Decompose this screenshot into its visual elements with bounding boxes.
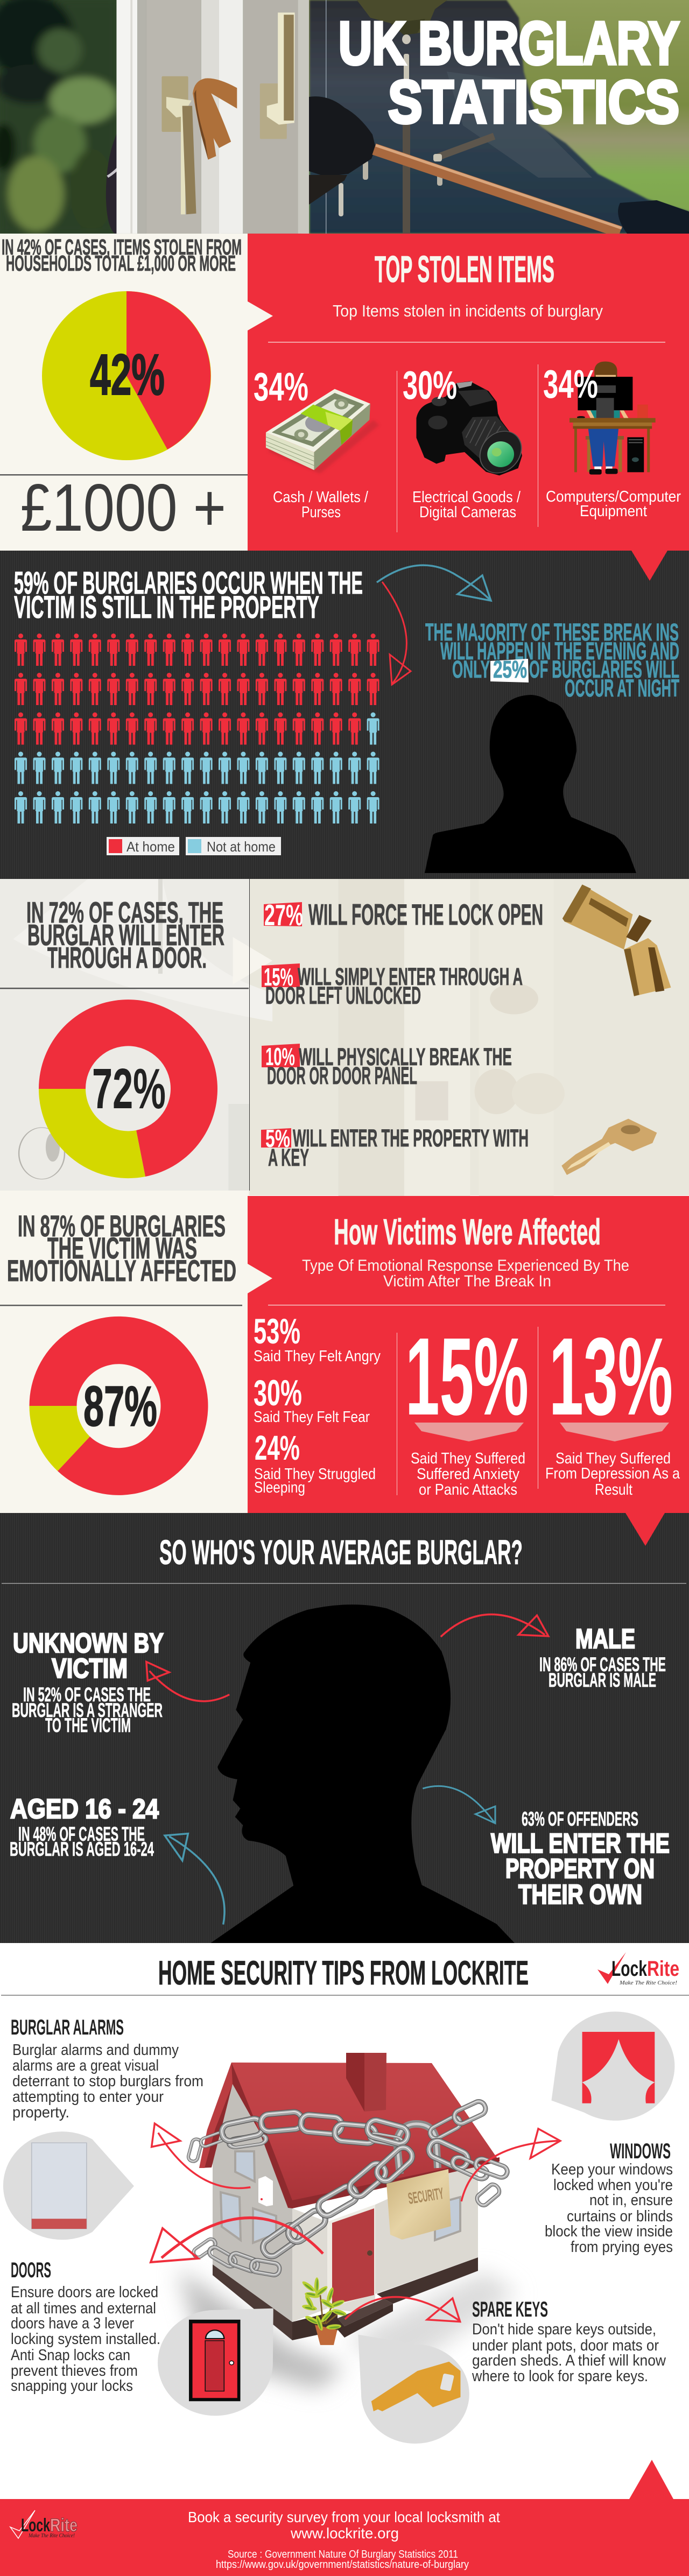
ground shadows [178,2269,517,2390]
logo: footer LockRite: Make The Rite Choice! [28,2533,75,2539]
tip: burglar alarms: BURGLAR ALARMS [11,2016,124,2039]
heading: IN 72% OF CASES, THE [26,896,223,929]
tip: doors: snapping your locks [11,2377,133,2395]
tip: windows: locked when you're [553,2177,673,2194]
tip: doors: Ensure doors are locked [11,2284,158,2301]
stat: angry [254,1311,381,1365]
item: electrical goods: Electrical Goods / [412,489,521,506]
icon: curtains [551,2011,674,2121]
arrow: spare keys [345,2297,460,2322]
stat: angry: Said They Felt Angry [254,1348,381,1365]
footer [0,2499,689,2576]
logo: footer LockRite: Lock [21,2515,50,2536]
item: cash [254,364,369,521]
item: break door: 10% [265,1043,295,1071]
subheading: Victim After The Break In [383,1272,551,1290]
stat: sleeping: 24% [255,1428,300,1467]
door [327,2205,375,2308]
item: unlocked door: WILL SIMPLY ENTER THROUGH A [298,963,523,990]
icon: broken lock cylinder [563,884,671,996]
panel: top stolen items [248,234,689,551]
item: unlocked door: DOOR LEFT UNLOCKED [265,982,421,1009]
stat: sleeping: Said They Struggled [254,1466,376,1483]
tip: spare keys [472,2298,666,2385]
item: unlocked door [262,963,523,1009]
stat: depression [545,1315,680,1498]
logo: LockRite [597,1952,679,1986]
callout: unknown by victim: UNKNOWN BY [13,1628,164,1658]
title [339,10,679,136]
icon: camera [416,381,527,476]
background door photo [13,879,565,1196]
heading: 42% of cases: IN 42% OF CASES, ITEMS STOLEN FROM [2,235,242,259]
tip: burglar alarms: alarms are a great visual [12,2057,159,2074]
tip: windows: Keep your windows [551,2161,673,2178]
tip: burglar alarms: attempting to enter your [12,2088,164,2106]
source: https://www.gov.uk/government/statistics/nature-of-burglary [216,2559,469,2571]
silhouette: burglar head [210,1604,515,1944]
donut chart 72% [39,1000,217,1178]
step [338,2299,393,2326]
item: computers [543,362,681,520]
blue note text: 25% [493,656,527,683]
callout: aged 16-24 [10,1793,159,1860]
window and door frame [0,0,312,234]
pie chart 42%: 42% [90,342,165,407]
item: electrical goods: Digital Cameras [419,504,516,521]
tip: doors: DOORS [11,2258,51,2282]
icon: red door [158,2308,273,2416]
arrow: blue to aged [165,1834,224,1925]
tip: windows: not in, ensure [589,2192,673,2209]
tip: spare keys: under plant pots, door mats or [472,2337,659,2354]
padlock [386,2169,451,2240]
legend: Not at home [207,839,276,855]
callout: unknown by victim: BURGLAR IS A STRANGER [12,1699,163,1721]
arrow: doors [151,2218,323,2262]
callout: aged 16-24: IN 48% OF CASES THE [18,1823,145,1845]
subheading: Type Of Emotional Response Experienced By The [302,1257,629,1275]
plant [301,2277,347,2345]
stat: sleeping: Sleeping [254,1479,305,1496]
windows [221,2151,460,2243]
item: break door: DOOR OR DOOR PANEL [267,1062,417,1089]
callout: unknown by victim: IN 52% OF CASES THE [23,1684,151,1706]
callout: on their own: THEIR OWN [518,1879,642,1910]
stat: anxiety: Suffered Anxiety [417,1466,519,1483]
donut chart 87% [29,1317,208,1495]
stat: anxiety: Said They Suffered [411,1450,525,1467]
legend: At home [126,839,175,855]
item: key: 5% [265,1124,290,1152]
tip: doors: prevent thieves from [11,2362,138,2380]
callout: unknown by victim: VICTIM [52,1653,128,1684]
tip: doors: locking system installed. [11,2331,160,2348]
icon: alarm box [3,2131,134,2240]
panel: victim at home [0,551,689,879]
stat: fear [254,1373,370,1426]
callout: male: MALE [575,1623,635,1654]
logo: footer LockRite: Rite [50,2515,78,2536]
tip: spare keys: where to look for spare keys. [472,2368,648,2385]
tip: burglar alarms [11,2016,203,2121]
pictogram: 100 people [15,634,379,824]
item: force lock [264,898,543,932]
call to action: www.lockrite.org [290,2525,399,2542]
tip: doors: doors have a 3 lever [11,2315,134,2332]
item: key: A KEY [268,1144,309,1171]
tip: windows: block the view inside [545,2223,673,2240]
arrow: red [382,582,411,685]
burglar and garden background [301,0,689,234]
donut chart 87%: 87% [83,1375,157,1438]
item: cash: Purses [301,504,341,521]
arrow: blue [377,565,491,601]
blue note text [425,618,679,702]
heading: 42% of cases: HOUSEHOLDS TOTAL £1,000 OR MORE [6,251,236,276]
tip: burglar alarms: deterrant to stop burglars from [12,2073,203,2090]
stat: depression: Said They Suffered [556,1450,671,1467]
item: cash: 34% [254,364,308,409]
callout: on their own [491,1808,670,1910]
silhouette: victim [425,695,636,873]
subheading [302,1257,629,1290]
tip: windows [545,2139,673,2256]
panel: emotional effect stat [0,1195,248,1513]
heading: 42% of cases [2,235,242,276]
tip: doors: at all times and external [11,2300,156,2317]
heading: EMOTIONALLY AFFECTED [7,1254,236,1287]
stat: anxiety: or Panic Attacks [419,1481,517,1498]
item: electrical goods [403,363,521,521]
callout: aged 16-24: AGED 16 - 24 [10,1793,159,1824]
stat: anxiety [405,1315,529,1498]
heading: 59% OF BURGLARIES OCCUR WHEN THE [14,566,363,601]
tip: windows: curtains or blinds [567,2208,673,2225]
logo: footer LockRite [10,2510,78,2539]
logo: LockRite: Rite [647,1957,679,1981]
arrow: alarm [152,2123,250,2188]
item: computers: Equipment [580,503,647,520]
panel: how victims were affected [248,1196,689,1513]
stat: anxiety: 15% [405,1315,529,1438]
alarm box [258,2176,273,2206]
arrow: blue to offenders [423,1786,495,1824]
item: break door [262,1043,512,1089]
panel: average burglar [0,1513,689,1944]
icon: money stack [266,389,379,474]
item: force lock: 27% [264,898,303,932]
stat: sleeping [254,1428,376,1496]
source: Source : Government Nature Of Burglary Statistics 2011 [228,2549,458,2560]
heading: IN 87% OF BURGLARIES [18,1209,226,1243]
stat: depression: Result [595,1481,632,1498]
arrow: red to male [441,1614,549,1637]
item: unlocked door: 15% [264,963,293,991]
arrow: windows [461,2129,560,2201]
arrow: red to unknown [146,1662,229,1701]
call to action: Book a security survey from your local locksmith at [188,2509,500,2525]
pie chart 42% [42,291,211,460]
tip: spare keys: SPARE KEYS [472,2298,548,2321]
logo: LockRite: Make The Rite Choice! [619,1980,677,1986]
heading: BURGLAR WILL ENTER [27,918,224,952]
tip: spare keys: Don't hide spare keys outside, [472,2321,656,2338]
icon: gold key [561,1119,657,1175]
tip: burglar alarms: property. [12,2104,69,2121]
tip: burglar alarms: Burglar alarms and dummy [12,2042,179,2059]
heading: VICTIM IS STILL IN THE PROPERTY [14,590,319,625]
chains [187,2099,509,2276]
panel: 42% high value stat [0,234,248,551]
call to action [188,2509,500,2542]
callout: male [539,1623,666,1691]
house illustration [178,2053,517,2390]
heading: THE VICTIM WAS [47,1231,197,1265]
callout: unknown by victim [12,1628,164,1736]
subheading: Top Items stolen in incidents of burglary [333,301,603,320]
panel: door entry [0,879,689,1197]
item: cash: Cash / Wallets / [273,489,369,506]
£1000 + figure: £1000 + [20,471,226,545]
padlock: SECURITY [407,2185,445,2208]
roof [199,2063,269,2168]
tip: spare keys: garden sheds. A thief will know [472,2352,666,2369]
walls [213,2084,292,2322]
icon: gold key tile [358,2335,469,2444]
item: key [261,1124,529,1171]
logo: LockRite: Lock [611,1957,648,1981]
panel: home security tips [0,1943,689,2499]
callout: aged 16-24: BURGLAR IS AGED 16-24 [10,1838,154,1860]
item: computers: 34% [543,362,598,406]
heading [26,896,224,974]
legend [107,837,281,855]
hero banner photo [0,0,689,234]
stat: fear: Said They Felt Fear [254,1409,370,1426]
stat: angry: 53% [254,1311,300,1351]
item: break door: WILL PHYSICALLY BREAK THE [299,1043,512,1071]
source [216,2549,469,2571]
donut chart 72%: 72% [92,1057,166,1121]
stat: fear: 30% [254,1373,302,1413]
blue note text: ONLY [452,656,490,683]
heading [7,1209,236,1287]
heading [14,566,363,625]
tip: doors [11,2258,160,2395]
callout: unknown by victim: TO THE VICTIM [45,1714,131,1736]
heading: THROUGH A DOOR. [47,941,207,974]
icon: person at computer [570,362,656,475]
tip: windows: from prying eyes [571,2239,673,2256]
tip: doors: Anti Snap locks can [11,2347,130,2364]
item: electrical goods: 30% [403,363,457,407]
